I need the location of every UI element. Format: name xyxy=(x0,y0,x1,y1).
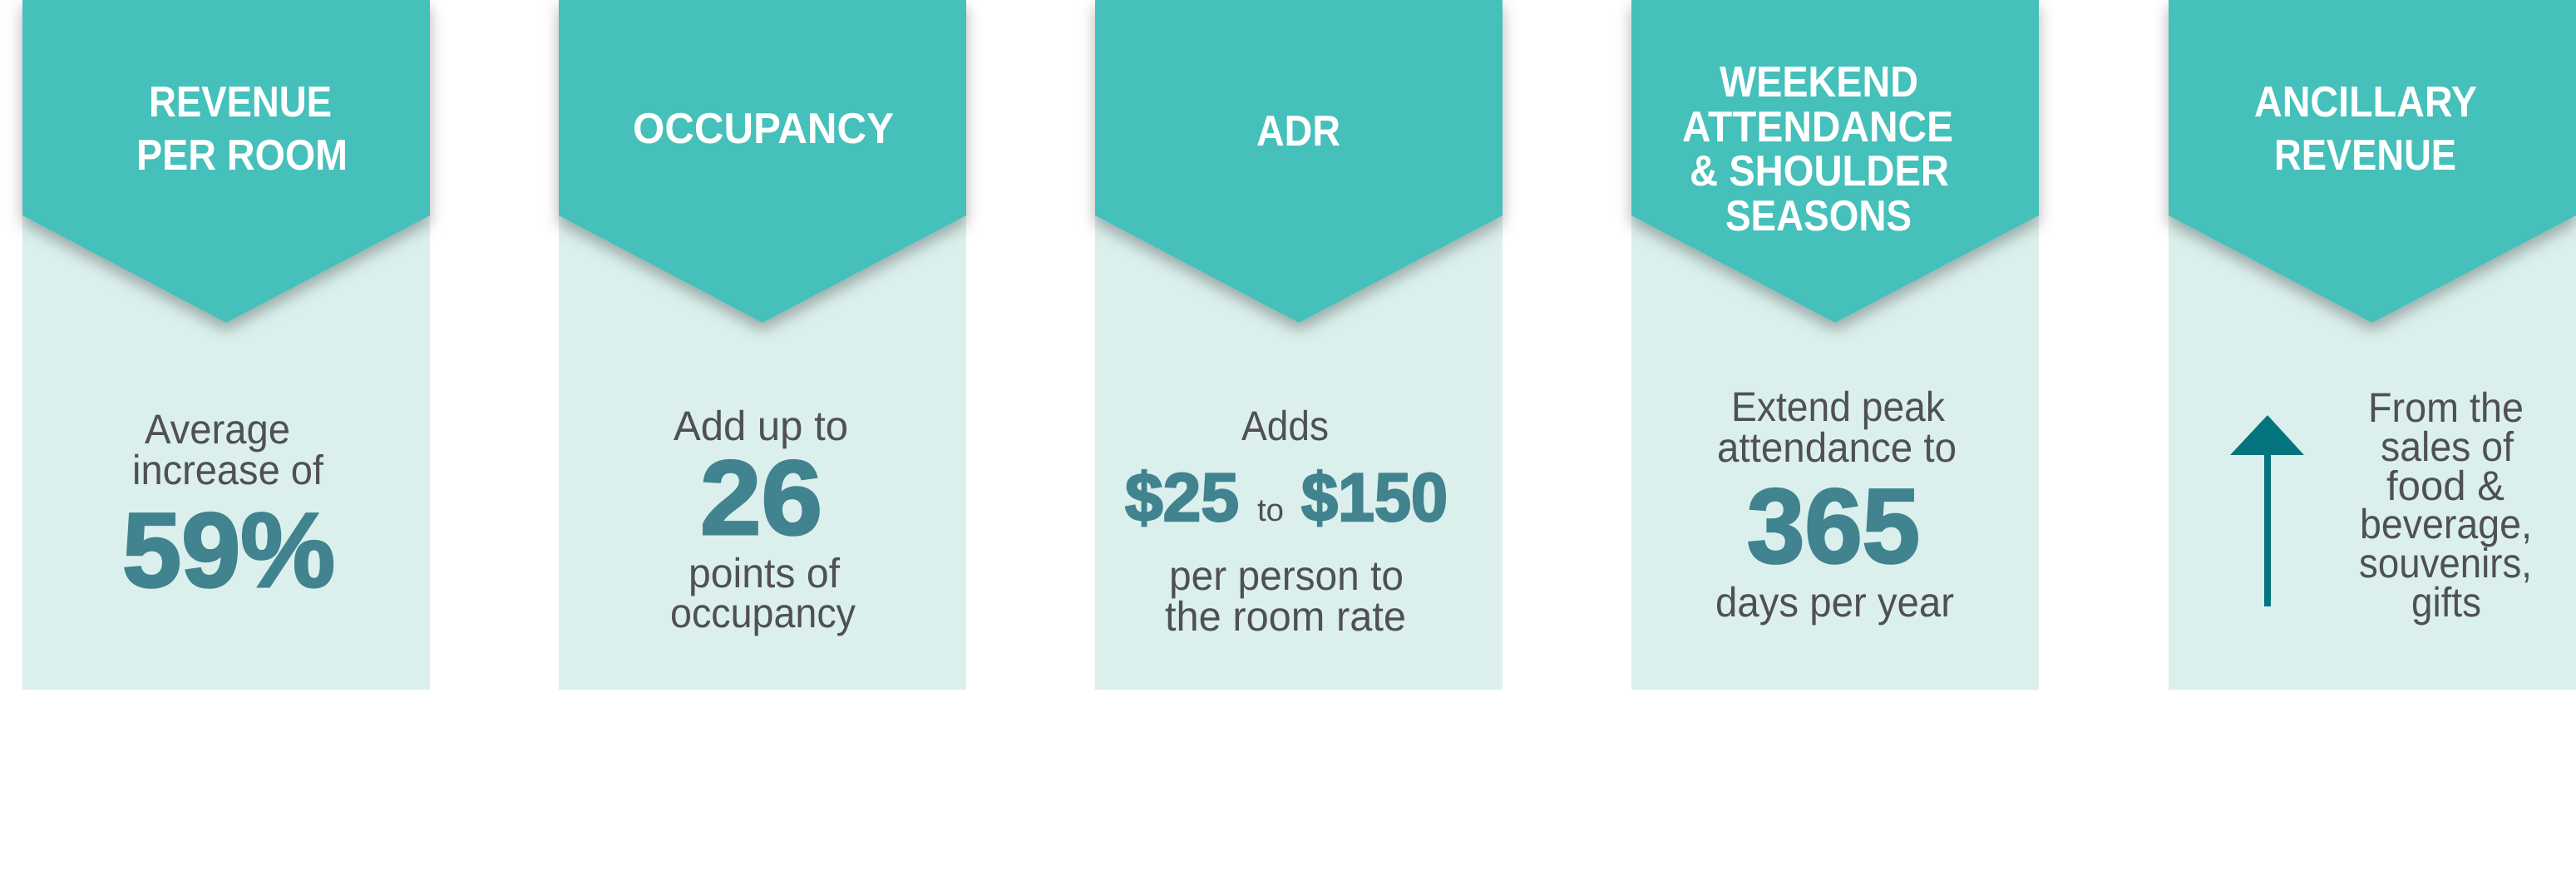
text: from the sales of food and beverage, souvenirs, gifts: sales of xyxy=(2381,423,2514,470)
text: from the sales of food and beverage, souvenirs, gifts: From the xyxy=(2368,384,2524,431)
heading: adr: ADR xyxy=(1256,107,1340,156)
panel: ancillary revenue xyxy=(2169,0,2576,690)
text: extend peak attendance to: attendance to xyxy=(1717,424,1957,471)
stat: 365: 365 xyxy=(1747,467,1920,585)
text: extend peak attendance to: Extend peak xyxy=(1731,384,1946,430)
text: days per year: days per year xyxy=(1715,579,1954,626)
heading: occupancy: OCCUPANCY xyxy=(633,105,894,153)
text: adds: Adds xyxy=(1241,403,1329,449)
text: average increase of: Average xyxy=(145,406,290,453)
panel: revenue per room xyxy=(22,0,430,690)
heading: weekend attendance and shoulder seasons: SEASONS xyxy=(1725,192,1912,240)
heading: ancillary revenue: ANCILLARY xyxy=(2254,78,2477,126)
text: points of occupancy xyxy=(670,550,856,636)
heading: revenue per room: PER ROOM xyxy=(136,131,348,180)
panel: occupancy xyxy=(559,0,966,690)
chevron header xyxy=(1631,0,2039,323)
heading: ancillary revenue: REVENUE xyxy=(2274,131,2456,180)
text: from the sales of food and beverage, souvenirs, gifts: gifts xyxy=(2411,579,2481,626)
stat: $25 to $150 xyxy=(1125,460,1448,536)
panel: adr xyxy=(1095,0,1503,690)
text: extend peak attendance to xyxy=(1717,384,1957,471)
heading: ancillary revenue xyxy=(2254,78,2477,180)
chevron header xyxy=(22,0,430,323)
text: from the sales of food and beverage, souvenirs, gifts: beverage, xyxy=(2360,501,2532,547)
heading: weekend attendance and shoulder seasons xyxy=(1682,58,1953,240)
panel background xyxy=(559,0,966,690)
icon: up arrow xyxy=(2230,415,2304,606)
stat: 59%: 59% xyxy=(122,491,335,609)
text: from the sales of food and beverage, souvenirs, gifts: food & xyxy=(2386,463,2504,509)
text: average increase of: increase of xyxy=(132,447,323,493)
stat: $25 to $150: $150 xyxy=(1301,460,1448,536)
stat: 26: 26 xyxy=(700,438,822,557)
text: per person to the room rate: per person to xyxy=(1169,552,1404,599)
heading: weekend attendance and shoulder seasons: & SHOULDER xyxy=(1690,147,1949,195)
panel background xyxy=(1631,0,2039,690)
panel background xyxy=(22,0,430,690)
text: points of occupancy: occupancy xyxy=(670,590,856,636)
heading: revenue per room: REVENUE xyxy=(149,78,332,126)
text: points of occupancy: points of xyxy=(688,550,840,596)
stat: $25 to $150: $25 xyxy=(1125,460,1239,536)
text: per person to the room rate: the room rate xyxy=(1165,593,1406,640)
text: add up to: Add up to xyxy=(674,403,848,449)
heading: weekend attendance and shoulder seasons: WEEKEND xyxy=(1720,58,1918,106)
panel background xyxy=(1095,0,1503,690)
heading: revenue per room xyxy=(136,78,348,180)
panel background xyxy=(2169,0,2576,690)
panel: weekend attendance and shoulder seasons xyxy=(1631,0,2039,690)
text: per person to the room rate xyxy=(1165,552,1406,640)
stat: $25 to $150: to xyxy=(1257,493,1284,528)
text: from the sales of food and beverage, souvenirs, gifts xyxy=(2359,384,2532,626)
text: from the sales of food and beverage, souvenirs, gifts: souvenirs, xyxy=(2359,540,2532,586)
chevron header xyxy=(2169,0,2576,323)
chevron header xyxy=(1095,0,1503,323)
heading: weekend attendance and shoulder seasons: ATTENDANCE xyxy=(1682,103,1953,151)
text: average increase of xyxy=(132,406,323,493)
chevron header xyxy=(559,0,966,323)
